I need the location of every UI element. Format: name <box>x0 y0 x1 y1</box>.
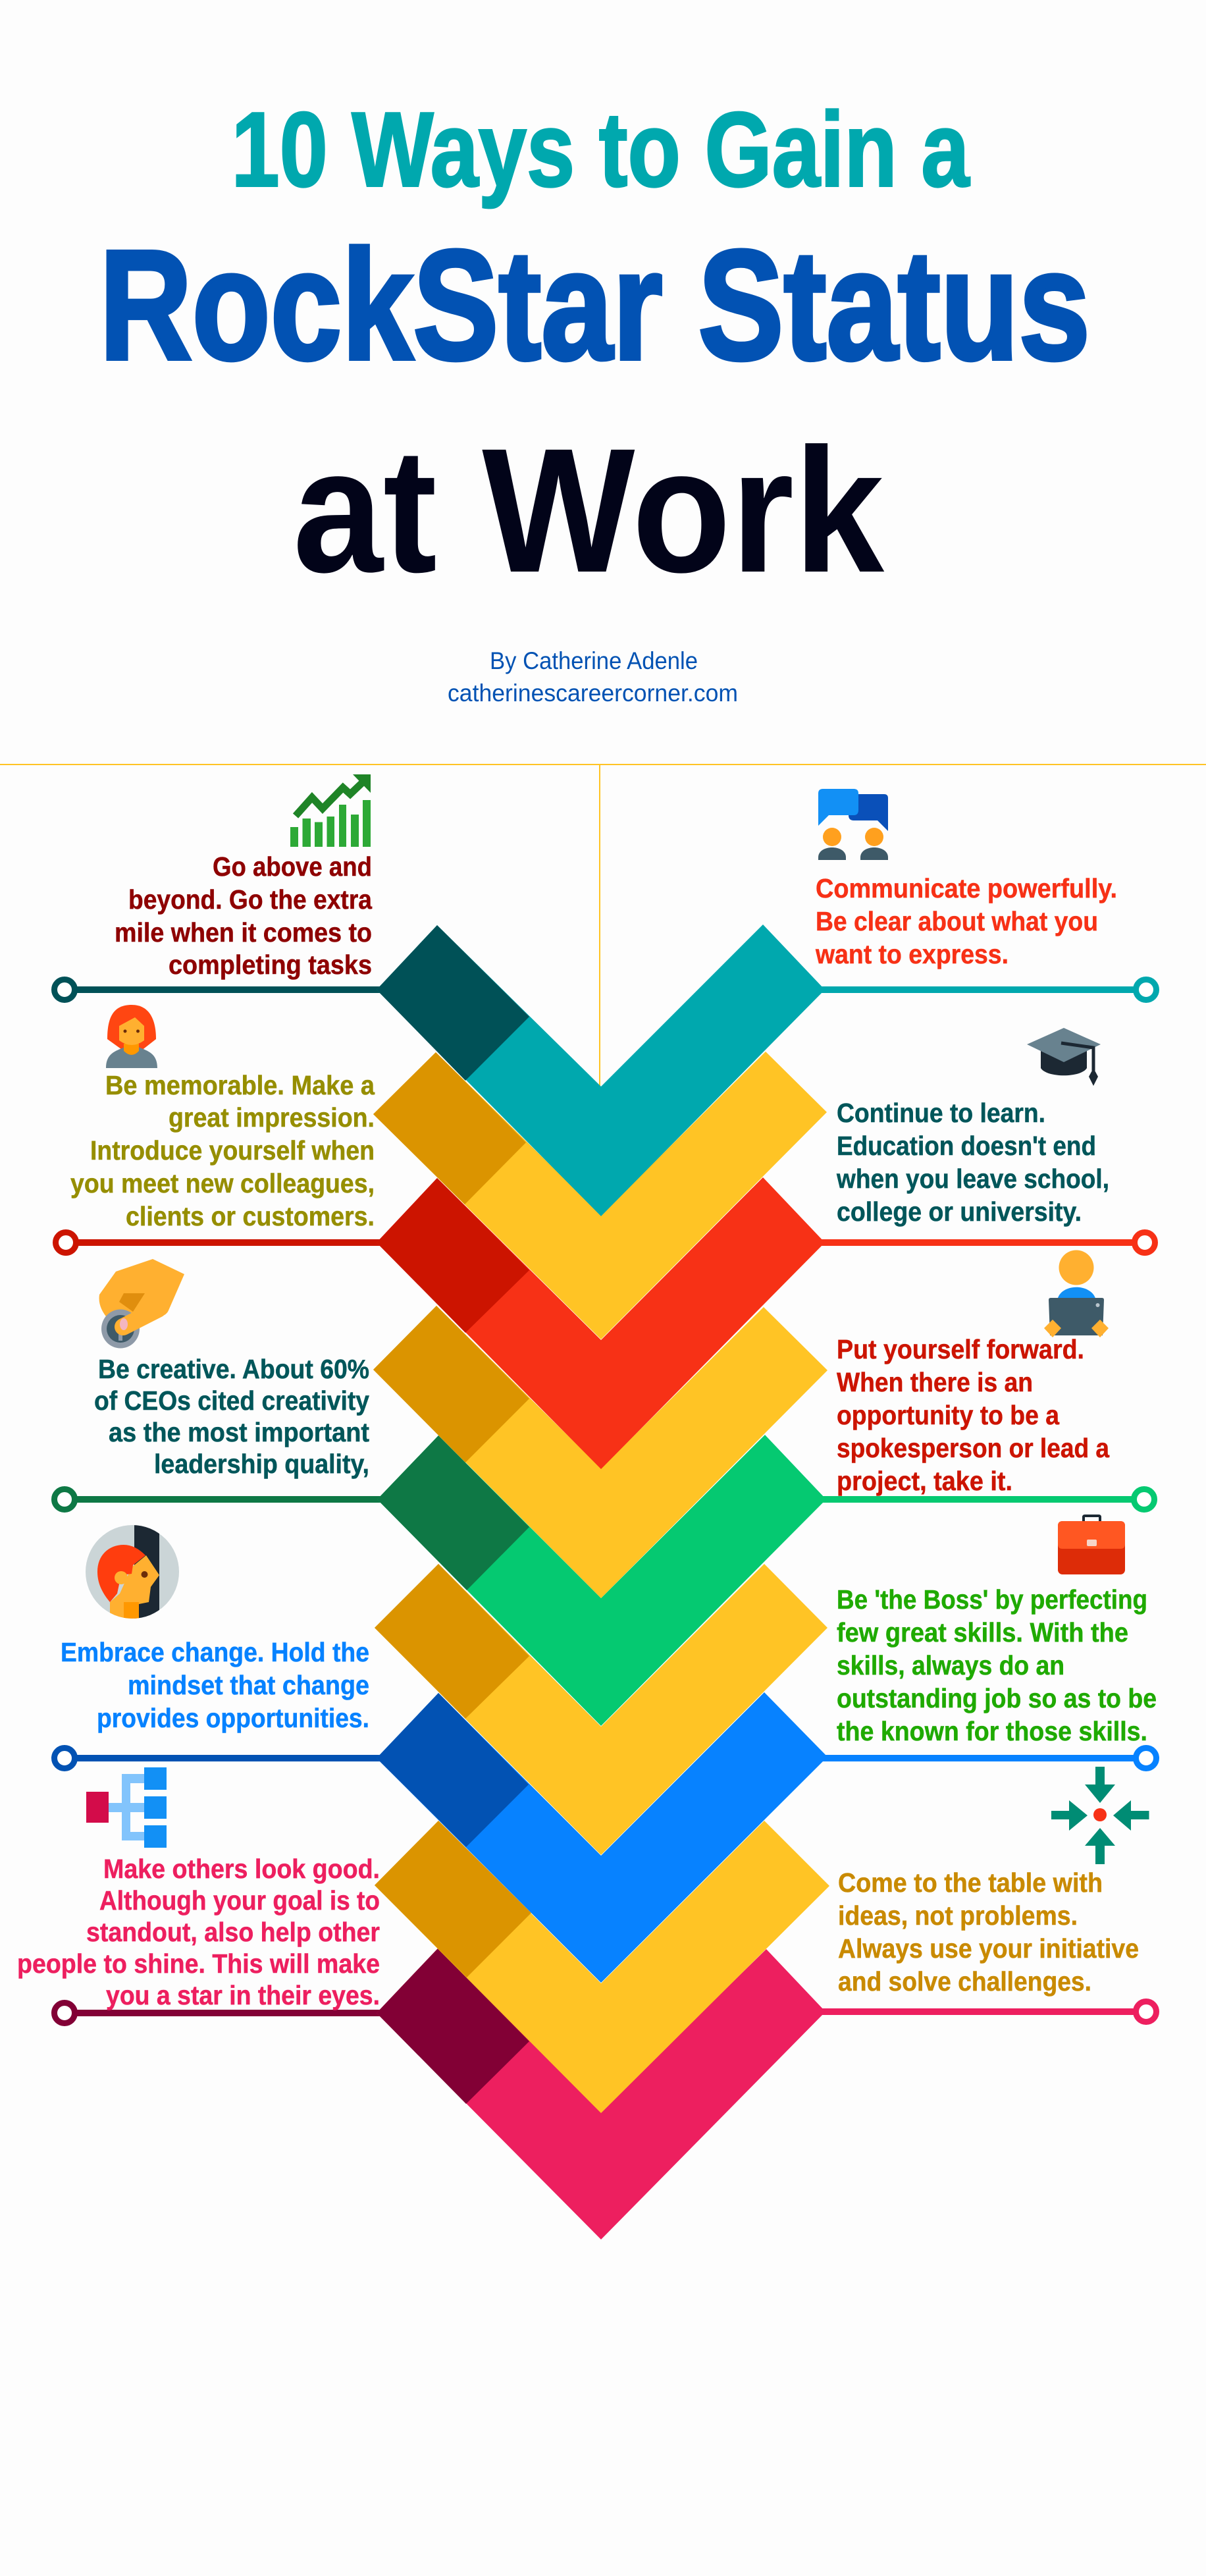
text: come to the table <box>838 1867 1139 1997</box>
text: make others look good <box>17 1854 380 2010</box>
chevron stack <box>373 925 829 2240</box>
text: be memorable: Introduce yourself when <box>90 1135 375 1166</box>
chevron 5 green <box>377 1435 826 1726</box>
icon: profile head <box>86 1521 179 1620</box>
icon: hierarchy diagram <box>86 1767 167 1848</box>
text: make others look good: people to shine. This will make <box>17 1948 380 1979</box>
chevron 7 blue <box>377 1692 827 1983</box>
text: be creative: Be creative. About 60% <box>98 1354 369 1384</box>
text: embrace change: mindset that change <box>128 1670 369 1700</box>
text: come to the table: Always use your initiative <box>838 1933 1139 1964</box>
text: be memorable: great impression. <box>169 1102 375 1133</box>
text: put yourself forward: spokesperson or lead a <box>837 1433 1110 1463</box>
text: embrace change <box>61 1637 369 1733</box>
text: be the boss: the known for those skills. <box>837 1716 1147 1746</box>
title: at Work <box>293 412 885 610</box>
text: continue to learn: Continue to learn. <box>837 1098 1045 1128</box>
text: come to the table: Come to the table with <box>838 1867 1103 1898</box>
text: communicate: want to express. <box>815 939 1009 969</box>
text: be the boss: outstanding job so as to be <box>837 1683 1157 1713</box>
chevron 6 yellow <box>375 1564 827 1855</box>
text: continue to learn: when you leave school, <box>836 1164 1109 1194</box>
text: make others look good: standout, also help other <box>86 1917 380 1947</box>
title <box>99 91 1090 610</box>
text: put yourself forward: opportunity to be a <box>837 1400 1060 1430</box>
text: make others look good: Although your goal is to <box>99 1885 380 1916</box>
icon: converging arrows <box>1051 1767 1149 1864</box>
byline: By Catherine Adenle <box>490 647 698 674</box>
byline <box>448 647 738 707</box>
text: go above <box>115 851 373 980</box>
icon: woman <box>106 1005 157 1068</box>
text: communicate: Be clear about what you <box>816 906 1098 936</box>
text: put yourself forward: project, take it. <box>837 1466 1012 1496</box>
chevron 8 yellow <box>375 1821 829 2113</box>
text: be memorable: clients or customers. <box>126 1201 375 1231</box>
text: go above: beyond. Go the extra <box>128 884 373 915</box>
text: be memorable: you meet new colleagues, <box>70 1168 375 1198</box>
text: be creative: of CEOs cited creativity <box>94 1385 369 1416</box>
connector lines <box>54 980 1156 2023</box>
text: embrace change: provides opportunities. <box>97 1703 369 1733</box>
icon: person with laptop <box>1044 1250 1109 1337</box>
text: be creative: leadership quality, <box>154 1449 369 1479</box>
chevron 2 yellow <box>373 1052 827 1339</box>
text: be the boss <box>837 1584 1157 1746</box>
text: go above: Go above and <box>213 851 372 882</box>
icon: hand turning dial <box>99 1259 184 1349</box>
text: put yourself forward: When there is an <box>837 1367 1033 1397</box>
text: communicate: Communicate powerfully. <box>816 873 1117 903</box>
icon: graduation cap <box>1027 1028 1101 1086</box>
text: make others look good: Make others look good. <box>103 1854 380 1884</box>
text: be memorable <box>70 1070 375 1231</box>
text: be the boss: skills, always do an <box>837 1650 1064 1680</box>
chevron 9 pink <box>377 1948 826 2240</box>
text: make others look good: you a star in their eyes. <box>106 1980 380 2010</box>
text: communicate <box>815 873 1117 969</box>
chevron 3 red <box>377 1177 825 1469</box>
text: continue to learn <box>836 1098 1109 1227</box>
text: be memorable: Be memorable. Make a <box>105 1070 375 1100</box>
icon: speech bubbles and people <box>818 789 888 860</box>
text: be the boss: Be 'the Boss' by perfecting <box>837 1584 1147 1615</box>
icon: growth chart <box>290 774 371 847</box>
text: embrace change: Embrace change. Hold the <box>61 1637 369 1667</box>
text: be creative: as the most important <box>109 1417 369 1447</box>
text: be creative <box>94 1354 369 1479</box>
text: go above: completing tasks <box>169 950 372 980</box>
text: go above: mile when it comes to <box>115 917 372 948</box>
text: continue to learn: college or university. <box>837 1196 1082 1227</box>
chevron 4 yellow <box>373 1306 827 1598</box>
text: come to the table: ideas, not problems. <box>838 1900 1078 1931</box>
text: put yourself forward <box>837 1334 1110 1496</box>
text: come to the table: and solve challenges. <box>838 1966 1091 1997</box>
text: continue to learn: Education doesn't end <box>837 1131 1096 1161</box>
icon: briefcase <box>1058 1516 1125 1574</box>
text: put yourself forward: Put yourself forward. <box>837 1334 1084 1364</box>
text: be the boss: few great skills. With the <box>837 1617 1128 1648</box>
title: 10 Ways to Gain a <box>232 91 970 209</box>
byline: catherinescareercorner.com <box>448 680 738 707</box>
chevron 1 teal <box>377 925 825 1216</box>
